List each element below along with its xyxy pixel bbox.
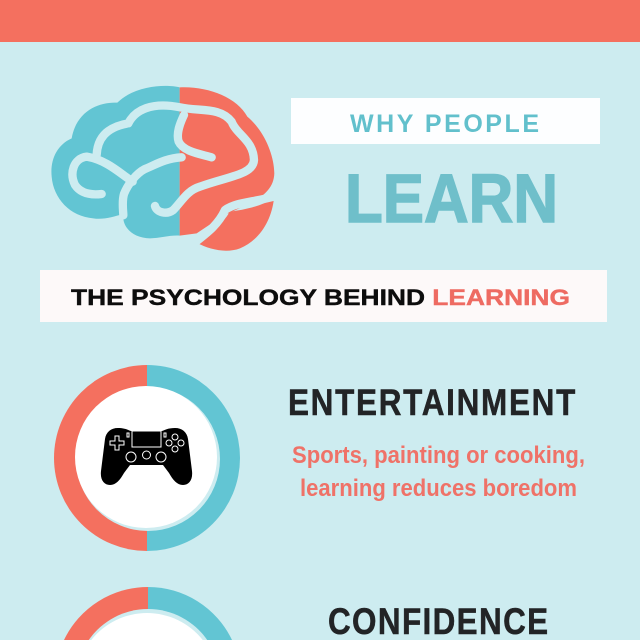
banner: why people [291, 98, 600, 144]
ring: entertainment [54, 365, 240, 551]
heading: entertainment: ENTERTAINMENT [288, 383, 575, 424]
banner: the psychology behind learning: THE PSYCHOLOGY BEHIND LEARNING [71, 285, 570, 310]
banner: the psychology behind learning [40, 270, 607, 322]
banner: why people: WHY PEOPLE [350, 110, 539, 138]
text: entertainment description: learning reduces boredom [300, 475, 577, 502]
icon: brain [51, 86, 278, 251]
top bar [0, 0, 640, 42]
ring: confidence [64, 587, 232, 640]
icon: game controller [101, 428, 192, 485]
heading: learn: LEARN [345, 160, 558, 237]
text: entertainment description: Sports, painting or cooking, [292, 442, 585, 469]
text: entertainment description [292, 442, 585, 502]
